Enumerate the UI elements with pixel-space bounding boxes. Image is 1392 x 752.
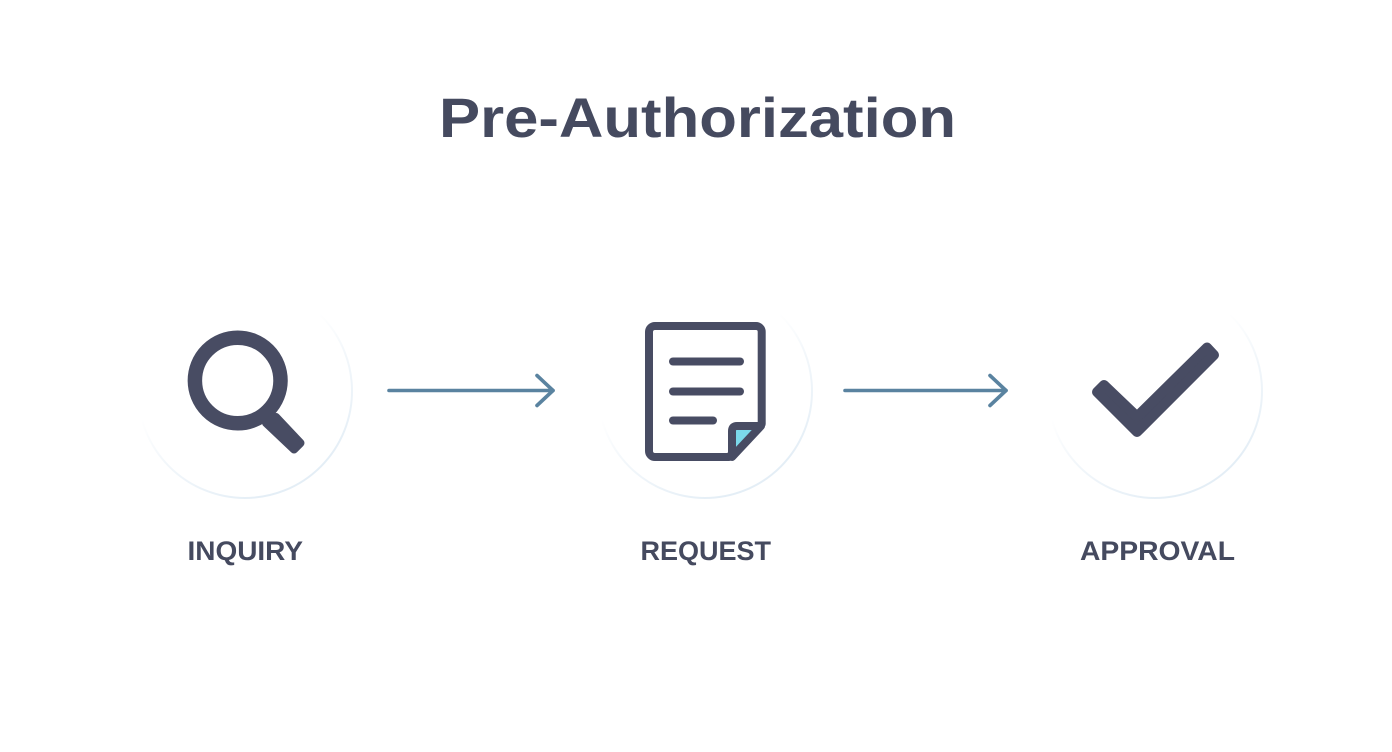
- icon: magnifying glass: [195, 338, 300, 450]
- document text lines: [673, 362, 740, 420]
- step: request: [598, 284, 812, 566]
- title: Pre-Authorization: [439, 86, 956, 149]
- label: approval: APPROVAL: [1080, 536, 1235, 566]
- icon circle: request: [598, 284, 812, 498]
- icon circle: approval: [1048, 284, 1262, 498]
- document folded corner: [732, 426, 761, 457]
- label: request: REQUEST: [640, 536, 771, 566]
- icon circle: inquiry: [138, 284, 352, 498]
- icon: check mark: [1097, 348, 1214, 432]
- label: inquiry: INQUIRY: [188, 536, 303, 566]
- icon: document: [649, 326, 762, 457]
- step: approval: [1048, 284, 1262, 566]
- arrow: request to approval: [845, 376, 1006, 406]
- arrow: inquiry to request: [389, 376, 553, 406]
- step: inquiry: [138, 284, 352, 566]
